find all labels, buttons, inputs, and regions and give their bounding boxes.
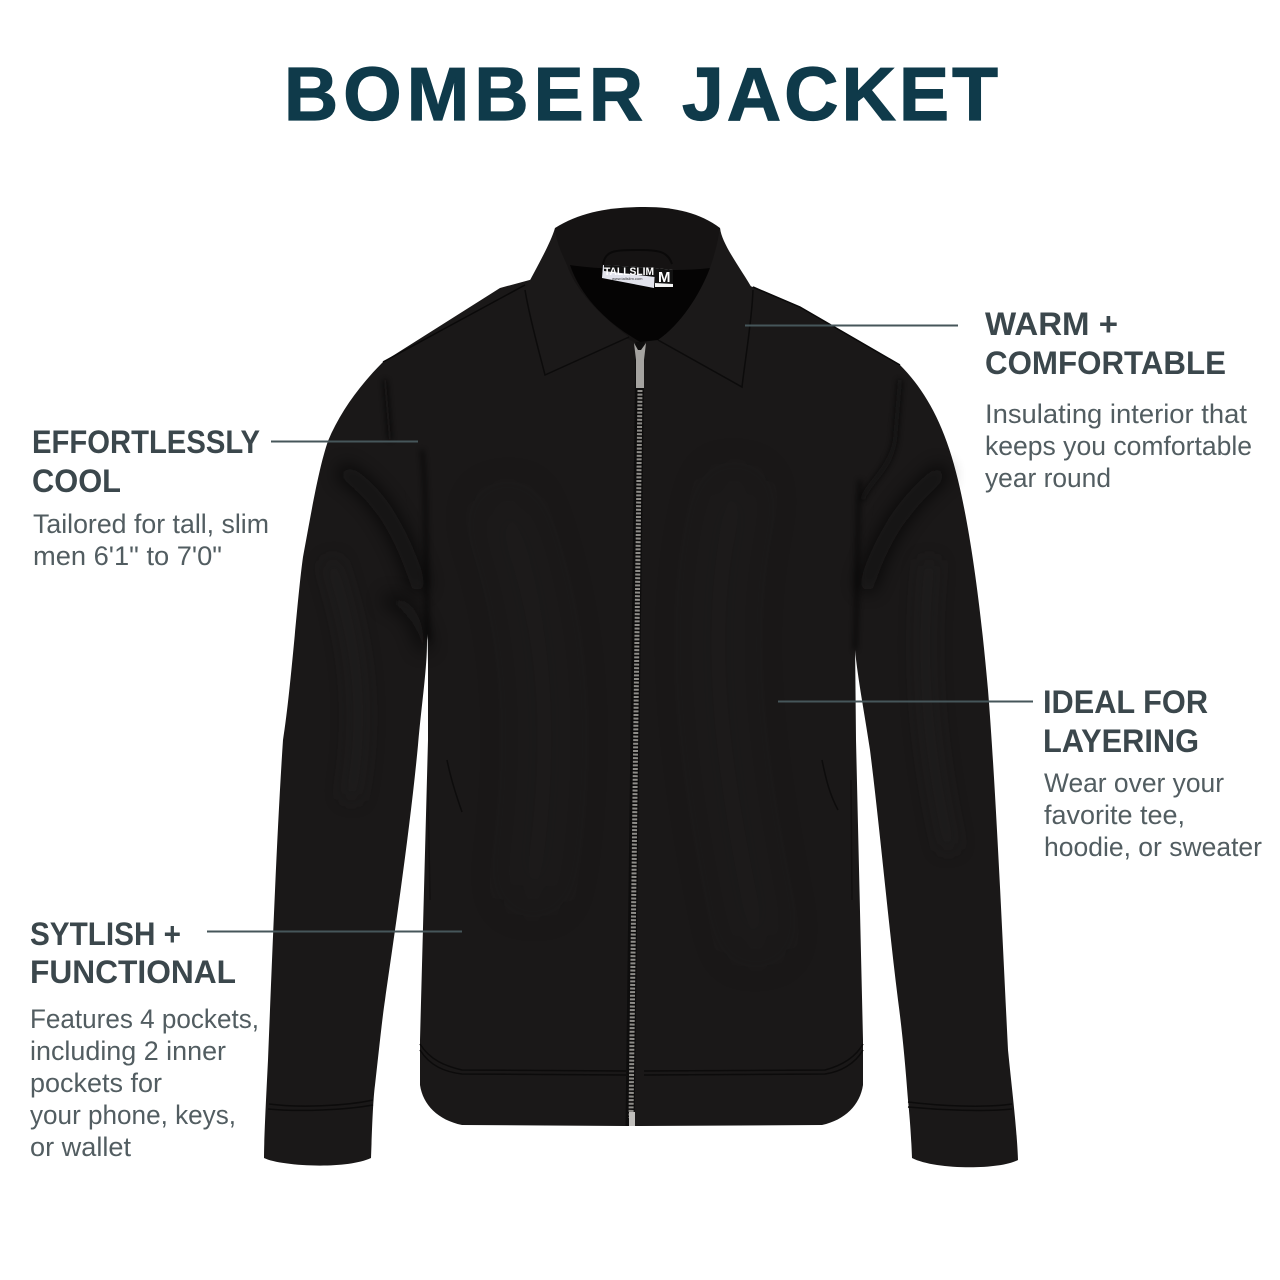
neck label [602, 265, 673, 288]
callout: stylish + functional [30, 916, 462, 1162]
title [284, 52, 998, 136]
leader line [271, 440, 418, 442]
waistband seam and cuffs [268, 1044, 1012, 1110]
neck label: M [658, 269, 670, 286]
neck label: TALLSLIM [604, 266, 654, 278]
pocket openings [428, 760, 852, 900]
description: hoodie, or sweater [1044, 832, 1262, 862]
title: JACKET [682, 52, 998, 136]
title: BOMBER [284, 52, 643, 136]
heading [1043, 684, 1208, 759]
description: favorite tee, [1044, 800, 1185, 830]
description [33, 509, 269, 571]
heading: COOL [32, 463, 121, 499]
heading: EFFORTLESSLY [32, 424, 260, 460]
jacket inner neck [570, 265, 710, 342]
zipper pull [629, 343, 646, 1126]
leader line [778, 700, 1033, 702]
description: keeps you comfortable [985, 431, 1252, 461]
collar edges [383, 285, 900, 387]
callout: ideal for layering [778, 684, 1262, 862]
description: Insulating interior that [985, 399, 1247, 429]
collar back [550, 207, 725, 345]
zipper teeth [631, 390, 640, 1118]
description: pockets for [30, 1068, 162, 1098]
jacket body [383, 250, 900, 1126]
heading: SYTLISH + [30, 916, 181, 952]
heading: COMFORTABLE [985, 345, 1226, 381]
neck label: www.tallslim.com [612, 276, 643, 281]
description: Wear over your [1044, 768, 1224, 798]
fabric folds [340, 380, 945, 650]
heading [32, 424, 260, 499]
heading: FUNCTIONAL [30, 954, 236, 990]
description: including 2 inner [30, 1036, 226, 1066]
leader line [745, 324, 958, 326]
description: men 6'1" to 7'0" [33, 541, 222, 571]
heading [985, 306, 1226, 381]
description: Features 4 pockets, [30, 1004, 259, 1034]
heading [30, 916, 236, 990]
heading: IDEAL FOR [1043, 684, 1208, 720]
description [1044, 768, 1262, 862]
heading: LAYERING [1043, 723, 1199, 759]
description [30, 1004, 259, 1162]
jacket illustration [264, 207, 1018, 1167]
description [985, 399, 1252, 493]
callout: effortlessly cool [32, 424, 418, 571]
jacket left sleeve [264, 362, 440, 1166]
jacket right sleeve [840, 365, 1018, 1167]
zipper tape [630, 342, 640, 1126]
leader line [207, 930, 462, 932]
collar left [525, 228, 629, 375]
hanger loop [603, 250, 672, 264]
description: Tailored for tall, slim [33, 509, 269, 539]
callout: warm + comfortable [745, 306, 1252, 493]
description: year round [985, 463, 1111, 493]
heading: WARM + [985, 306, 1118, 342]
collar right [658, 228, 753, 387]
description: your phone, keys, [30, 1100, 236, 1130]
description: or wallet [30, 1132, 131, 1162]
